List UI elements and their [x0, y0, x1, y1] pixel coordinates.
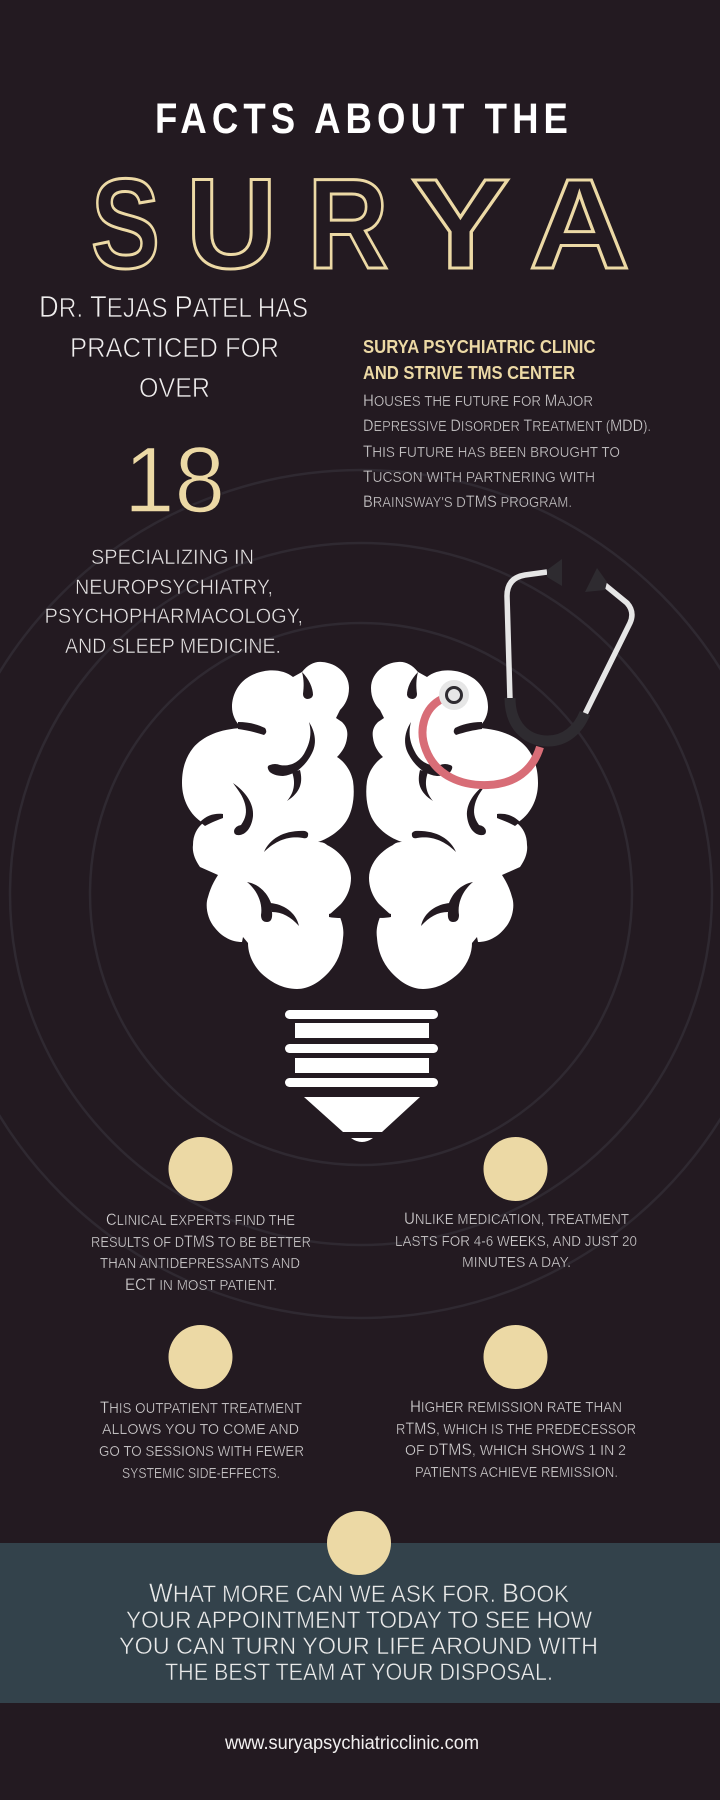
panel: fact clinical experts	[91, 1137, 311, 1294]
panel: fact outpatient treatment: THIS OUTPATIENT TREATMENT	[100, 1399, 302, 1417]
panel: fact clinical experts: CLINICAL EXPERTS FIND THE	[106, 1211, 295, 1229]
panel: fact remission rate	[396, 1325, 636, 1481]
panel: fact remission rate: HIGHER REMISSION RATE THAN	[410, 1398, 622, 1416]
panel: call to action band: THE BEST TEAM AT YOUR DISPOSAL.	[165, 1659, 553, 1686]
panel: fact outpatient treatment: ALLOWS YOU TO COME AND	[102, 1422, 299, 1438]
panel: fact outpatient treatment: GO TO SESSIONS WITH FEWER	[99, 1444, 304, 1460]
icon: stethoscope	[423, 559, 632, 785]
brain: left hemisphere	[182, 662, 354, 989]
text block: Dr. Patel experience intro: OVER	[139, 372, 210, 403]
panel: fact treatment length: LASTS FOR 4-6 WEEKS, AND JUST 20	[395, 1234, 637, 1250]
text block: specialties: SPECIALIZING IN	[91, 546, 254, 569]
text block: specialties	[44, 546, 303, 658]
panel: fact clinical experts: RESULTS OF DTMS TO BE BETTER	[91, 1233, 311, 1251]
heading: clinic name: AND STRIVE TMS CENTER	[363, 362, 575, 383]
text block: specialties: PSYCHOPHARMACOLOGY,	[44, 605, 303, 628]
text block: clinic description: TUCSON WITH PARTNERING WITH	[363, 468, 595, 486]
text block: specialties: AND SLEEP MEDICINE.	[65, 635, 281, 658]
text block: clinic description	[363, 392, 651, 511]
text block: clinic description: BRAINSWAY'S DTMS PROGRAM.	[363, 493, 572, 511]
marker circle	[168, 1325, 232, 1389]
title: facts about the: FACTS ABOUT THE	[155, 95, 573, 143]
number: 18 years: 18	[124, 427, 225, 532]
text block: Dr. Patel experience intro: DR. TEJAS PATEL HAS	[39, 289, 308, 324]
text block: Dr. Patel experience intro	[39, 289, 308, 403]
title: Surya outlined wordmark: A	[529, 153, 630, 296]
icon: brain lightbulb	[182, 662, 538, 1142]
text block: clinic description: THIS FUTURE HAS BEEN BROUGHT TO	[363, 443, 620, 461]
marker circle	[168, 1137, 232, 1201]
panel: call to action band: YOU CAN TURN YOUR LIFE AROUND WITH	[119, 1633, 598, 1660]
text block: specialties: NEUROPSYCHIATRY,	[75, 576, 273, 599]
heading: clinic name: SURYA PSYCHIATRIC CLINIC	[363, 336, 596, 357]
panel: fact outpatient treatment	[99, 1325, 304, 1482]
brain: right hemisphere	[366, 662, 538, 989]
marker circle	[327, 1511, 391, 1575]
panel: fact remission rate: OF DTMS, WHICH SHOWS 1 IN 2	[405, 1441, 626, 1459]
marker circle	[484, 1325, 548, 1389]
text block: clinic description: DEPRESSIVE DISORDER TREATMENT (MDD).	[363, 417, 651, 435]
panel: fact remission rate: PATIENTS ACHIEVE REMISSION.	[415, 1465, 618, 1481]
panel: fact treatment length	[395, 1137, 637, 1271]
panel: call to action band: YOUR APPOINTMENT TODAY TO SEE HOW	[126, 1607, 592, 1634]
panel: fact remission rate: RTMS, WHICH IS THE PREDECESSOR	[396, 1420, 636, 1438]
text block: clinic description: HOUSES THE FUTURE FOR MAJOR	[363, 392, 593, 410]
website url: www.suryapsychiatricclinic.com	[224, 1733, 479, 1754]
title: Surya outlined wordmark: S	[91, 153, 160, 296]
panel: fact treatment length: UNLIKE MEDICATION, TREATMENT	[404, 1210, 629, 1228]
panel: call to action band	[0, 1511, 720, 1703]
panel: fact treatment length: MINUTES A DAY.	[462, 1255, 571, 1271]
marker circle	[484, 1137, 548, 1201]
heading: clinic name	[363, 336, 596, 383]
bulb base	[285, 1010, 438, 1142]
panel: fact clinical experts: ECT IN MOST PATIENT.	[125, 1276, 277, 1294]
panel: fact outpatient treatment: SYSTEMIC SIDE-EFFECTS.	[122, 1466, 280, 1482]
concentric background rings	[0, 470, 720, 1318]
panel: call to action band: WHAT MORE CAN WE ASK FOR. BOOK	[149, 1578, 569, 1608]
panel: fact clinical experts: THAN ANTIDEPRESSANTS AND	[100, 1256, 300, 1272]
title: Surya outlined wordmark: R	[308, 153, 388, 296]
title: Surya outlined wordmark: U	[186, 153, 277, 296]
text block: Dr. Patel experience intro: PRACTICED FOR	[70, 332, 279, 363]
title: Surya outlined wordmark	[91, 153, 630, 296]
title: Surya outlined wordmark: Y	[411, 153, 510, 296]
